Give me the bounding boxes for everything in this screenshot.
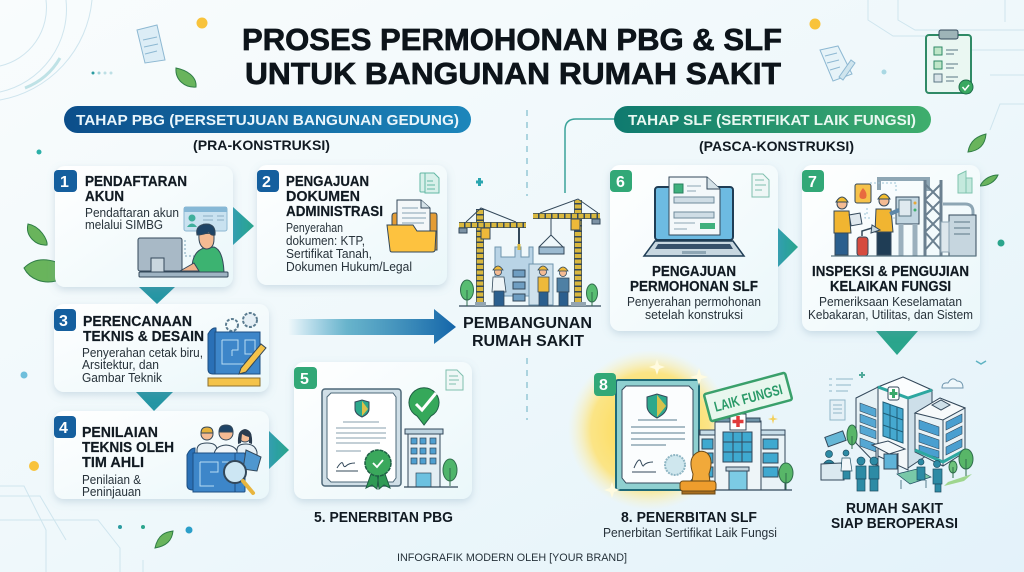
panel: step 6 [610, 165, 778, 331]
trees [847, 425, 857, 445]
label: construction [463, 315, 592, 350]
leaves [24, 68, 998, 548]
icon: trees [460, 280, 598, 306]
icon: folder [387, 200, 437, 252]
heading: tahap SLF: (PASCA-KONSTRUKSI) [699, 138, 854, 154]
panel: step 6: PERMOHONAN SLF [630, 279, 758, 295]
panel: step 4: TIM AHLI [82, 455, 144, 471]
panel: step 8 certificate: 8 [599, 377, 608, 394]
panel: step 5: 5 [300, 371, 309, 388]
label: hospital ready: RUMAH SAKIT [846, 500, 943, 517]
label: step 8 [603, 509, 777, 540]
panel: step 3: Arsitektur, dan [82, 358, 159, 372]
panel: step 1: AKUN [85, 189, 124, 205]
icon: sparkles [604, 359, 778, 498]
panel: step 4: TEKNIS OLEH [82, 440, 174, 456]
panel: step 2: ADMINISTRASI [286, 204, 383, 220]
icon: stamp [680, 451, 716, 494]
icon: paper and pen right [820, 46, 855, 81]
panel: step 4: PENILAIAN [82, 425, 158, 441]
icon: right crane [533, 199, 600, 306]
icon: left crane [459, 208, 526, 306]
illustration: construction site [459, 199, 601, 306]
icon: person at computer [138, 207, 228, 277]
panel: step 7: 7 [808, 174, 817, 191]
panel: step 3: 3 [59, 313, 68, 330]
panel: step 1: melalui SIMBG [85, 218, 163, 232]
heading: tahap PBG [64, 106, 471, 153]
panel: step 4: Peninjauan [82, 485, 141, 499]
label: construction: RUMAH SAKIT [472, 333, 585, 350]
label: step 8: 8. PENERBITAN SLF [621, 509, 757, 526]
panel: step 3: PERENCANAAN [83, 314, 192, 330]
panel: step 2 [257, 165, 447, 285]
icon: paper left [137, 25, 165, 63]
label: hospital ready: SIAP BEROPERASI [831, 515, 958, 532]
icon: experts reviewing blueprint [187, 425, 261, 493]
connector: construction to SLF [565, 119, 616, 193]
panel: step 2: DOKUMEN [286, 189, 360, 205]
label: hospital ready [831, 500, 958, 532]
icon: blueprint with pencil and gears [208, 313, 266, 386]
panel: step 4: Penilaian & [82, 473, 142, 487]
panel: step 7: Kebakaran, Utilitas, dan Sistem [808, 308, 973, 322]
icon: documents [420, 173, 439, 193]
label: step 5: 5. PENERBITAN PBG [314, 509, 453, 526]
right wing [915, 398, 965, 466]
panel: step 2: dokumen: KTP, [286, 234, 365, 248]
heading: tahap PBG: TAHAP PBG (PERSETUJUAN BANGUNAN GEDUNG) [76, 112, 459, 129]
panel: step 2: Penyerahan [286, 221, 343, 235]
center dashed divider [526, 110, 528, 420]
panel: step 6: setelah konstruksi [645, 308, 743, 322]
panel: step 4: 4 [59, 420, 68, 437]
heading: tahap SLF: TAHAP SLF (SERTIFIKAT LAIK FUNGSI) [628, 112, 916, 129]
icon: workers [492, 266, 569, 306]
panel: step 1 [54, 166, 233, 287]
panel: step 7: Pemeriksaan Keselamatan [819, 295, 962, 309]
icon: laik fungsi stamp [704, 373, 792, 421]
panel: step 2: Sertifikat Tanah, [286, 247, 372, 261]
heading: tahap SLF [614, 106, 931, 154]
entrance [872, 441, 905, 454]
arrows between steps [136, 207, 918, 469]
main tower [878, 377, 932, 468]
panel: step 7 [802, 165, 980, 331]
panel: step 4 [54, 411, 269, 499]
panel: step 1: PENDAFTARAN [85, 174, 187, 190]
icon: laptop with form [644, 174, 769, 256]
heading: tahap PBG: (PRA-KONSTRUKSI) [193, 137, 330, 153]
panel: step 7: INSPEKSI & PENGUJIAN [812, 264, 969, 280]
panel: step 6: Penyerahan permohonan [627, 295, 761, 309]
illustration: hospital ready [821, 372, 973, 492]
left wing [856, 387, 878, 466]
panel: step 6: PENGAJUAN [652, 264, 736, 280]
icon: laik fungsi stamp: LAIK FUNGSI [713, 382, 784, 416]
icon: permit certificate and building [322, 370, 463, 489]
footer credit: INFOGRAFIK MODERN OLEH [YOUR BRAND] [397, 552, 627, 564]
big arrow to construction [288, 309, 456, 344]
panel: step 3: TEKNIS & DESAIN [83, 329, 204, 345]
panel: step 3 [54, 304, 269, 392]
panel: step 1: Pendaftaran akun [85, 206, 179, 220]
panel: step 5 [294, 362, 472, 499]
panel: step 7: KELAIKAN FUNGSI [830, 279, 951, 295]
reception [825, 431, 846, 447]
label: construction: PEMBANGUNAN [463, 315, 592, 332]
panel: step 2: PENGAJUAN [286, 174, 369, 190]
title: PROSES PERMOHONAN PBG & SLF [242, 22, 782, 57]
icon: inspection scene [831, 171, 976, 256]
panel: step 6: 6 [616, 174, 625, 191]
icon: clipboard [926, 30, 973, 94]
title: UNTUK BANGUNAN RUMAH SAKIT [245, 56, 781, 91]
icon: hospital [699, 414, 793, 490]
panel: step 2: 2 [262, 174, 271, 191]
panel: step 2: Dokumen Hukum/Legal [286, 260, 412, 274]
panel: step 1: 1 [60, 174, 69, 191]
panel: step 8 certificate [568, 350, 793, 510]
label: step 8: Penerbitan Sertifikat Laik Fungsi [603, 526, 777, 540]
title [242, 22, 782, 91]
panel: step 3: Penyerahan cetak biru, [82, 346, 203, 360]
panel: step 3: Gambar Teknik [82, 371, 163, 385]
